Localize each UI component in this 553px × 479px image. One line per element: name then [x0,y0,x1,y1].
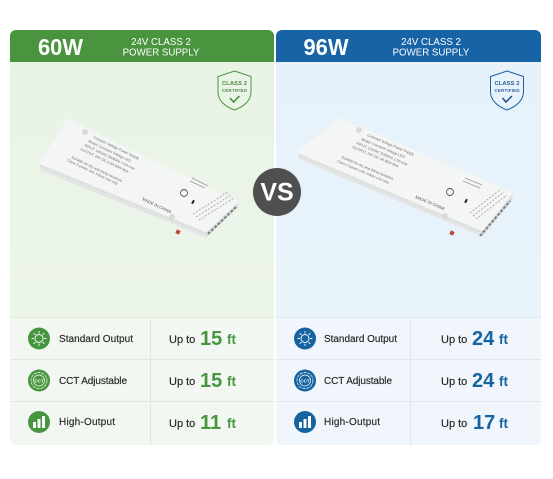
badge: Class 2 certified blue [490,71,524,110]
row: Standard Output 96W: ft [499,332,508,347]
row: Standard Output 60W: ft [227,332,236,347]
product: 96W power supply unit: Class 2 power unit, indoor use only [337,159,390,185]
row: Standard Output 60W: Up to [169,334,195,346]
row: Standard Output 60W [28,328,236,350]
row: High-Output 60W: 11 [200,412,221,434]
row: High-Output 60W [28,411,236,434]
product: 60W power supply unit [40,120,237,237]
row: Standard Output 96W: 24 [472,328,495,350]
product: 96W power supply unit [298,119,512,236]
row: CCT Adjustable 96W: CCT Adjustable [324,376,392,387]
comparison table: 60W [10,317,274,445]
product: 96W power supply unit: OUTPUT: 24V DC 4A 96W Max [352,145,399,169]
VS badge [253,168,301,216]
row: CCT Adjustable 60W: Up to [169,376,195,388]
row: High-Output 96W: High-Output [324,417,380,428]
row: CCT Adjustable 60W: 15 [200,370,222,392]
product: 96W power supply unit: Constant Voltage Power Supply [367,133,415,157]
row: CCT Adjustable 96W: CCT [300,378,310,383]
row: High-Output 60W: High-Output [59,417,115,428]
product: 96W power supply unit: INPUT: 120VAC 50/60Hz 1.5A max [356,141,409,167]
row: High-Output 60W: Up to [169,418,195,430]
panel: 60W power supply [10,30,274,445]
row: CCT Adjustable 60W [28,370,236,392]
product: 60W power supply unit: MADE IN CHINA [142,196,172,215]
row: CCT Adjustable 60W: CCT [34,378,44,383]
row: CCT Adjustable 96W [294,370,508,392]
product: 60W power supply unit: INPUT: 120VAC 50/60Hz 1.5A max [84,143,136,171]
panel header: 60W: 60W [38,34,83,60]
product: 60W power supply unit: OUTPUT: 24V DC 2.5A 60W Max [80,147,129,174]
row: High-Output 96W: 17 [473,412,495,434]
product: 96W power supply unit: MADE IN CHINA [415,194,446,211]
row: High-Output 60W: ft [227,416,236,431]
row: CCT Adjustable 60W: ft [227,374,236,389]
panel header: 96W [276,30,541,62]
badge: Class 2 certified blue: CERTIFIED [494,88,520,93]
row: CCT Adjustable 96W: 24 [472,370,495,392]
row: CCT Adjustable 60W: CCT Adjustable [59,376,127,387]
row: Standard Output 60W: 15 [200,328,222,350]
product: 60W power supply unit: Constant Voltage Power Supply [93,135,140,161]
panel header: 96W: 96W [304,34,349,60]
comparison table: 96W [276,317,541,445]
panel header: 60W [10,30,274,62]
badge: Class 2 certified green [218,71,251,110]
product: 60W power supply unit: Suitable for dry and damp locations [71,155,123,183]
row: CCT Adjustable 96W: Up to [441,376,467,388]
badge: Class 2 certified green: CLASS 2 [222,81,247,87]
panel header: 96W: POWER SUPPLY [393,48,470,59]
product: 96W power supply unit: Model: Constant Voltage LED [361,137,406,159]
row: Standard Output 96W: Standard Output [324,334,397,345]
row: Standard Output 60W: Standard Output [59,334,133,345]
badge: Class 2 certified blue: CLASS 2 [494,81,520,87]
VS badge: VS [260,178,294,206]
product: 60W power supply unit: Model: Constant Voltage LED [88,139,132,163]
row: High-Output 96W: ft [499,416,508,431]
panel header: 60W: 24V CLASS 2 [131,37,191,48]
panel header: 60W: POWER SUPPLY [123,48,200,59]
panel header: 96W: 24V CLASS 2 [401,37,461,48]
row: High-Output 96W: Up to [441,418,467,430]
row: Standard Output 96W [294,328,508,350]
row: CCT Adjustable 96W: ft [499,374,508,389]
panel: 96W power supply [276,30,541,445]
row: High-Output 96W [294,411,508,434]
product: 60W power supply unit: Class 2 power unit, indoor use only [67,158,119,186]
badge: Class 2 certified green: CERTIFIED [222,88,247,93]
row: Standard Output 96W: Up to [441,334,467,346]
product: 96W power supply unit: Suitable for dry and damp locations [341,155,394,181]
